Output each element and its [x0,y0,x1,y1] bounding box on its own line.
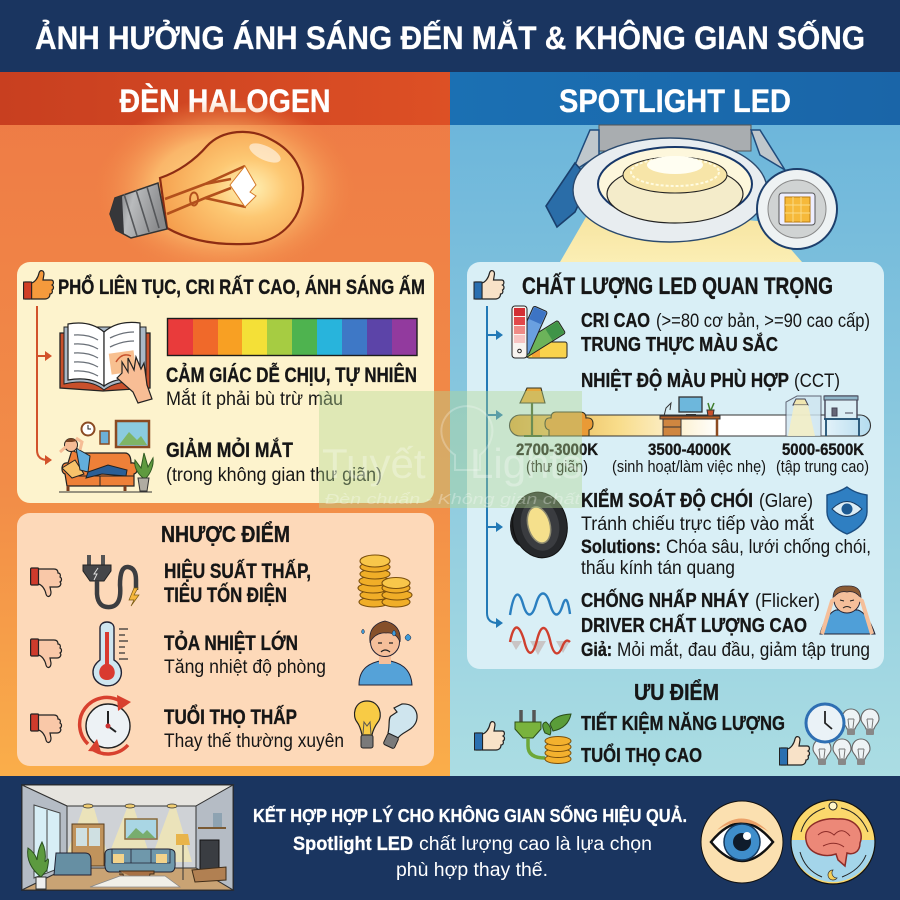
watermark: Lights [470,440,582,487]
labels: cool CCT [776,440,869,476]
card: halogen cons [17,513,434,766]
icon: gold coins [358,555,412,607]
text: short lifespan [164,705,344,752]
text: CRI: CRI CAO [581,310,650,332]
text: CRI: (>=80 cơ bản, >=90 cao cấp) [656,311,870,332]
text: comfortable: CẢM GIÁC DỄ CHỊU, TỰ NHIÊN [166,363,417,387]
text: conclusion: chất lượng cao là lựa chọn [419,834,652,855]
LED header [450,72,900,125]
text: short lifespan: Thay thế thường xuyên [164,731,344,752]
icon: flicker waves [510,594,570,655]
icon: sweating person [359,621,412,685]
icon: clock with bulbs and thumb [780,704,879,765]
icon: eye [701,801,783,883]
card: LED quality [467,262,884,669]
arrow: blue connector [487,306,503,628]
icon: green plug with coins [515,710,571,764]
text: high heat: Tăng nhiệt độ phòng [164,657,326,678]
icon: plug [83,555,139,607]
icon: living room [22,785,233,890]
text: CCT: (CCT) [794,371,840,392]
icon: thermometer [93,622,128,686]
labels: neutral CCT [612,440,766,476]
text: conclusion: KẾT HỢP HỢP LÝ CHO KHÔNG GIAN SỐNG HIỆU QUẢ. [253,805,687,826]
text: reduces eye strain: GIẢM MỎI MẮT [166,438,293,462]
text: flicker [581,588,870,661]
text: flicker: CHỐNG NHẤP NHÁY [581,588,750,612]
text: CCT: NHIỆT ĐỘ MÀU PHÙ HỢP [581,368,789,392]
icon: person resting on sofa [59,421,153,492]
watermark: Tuyết [322,440,426,487]
icon: aquarium workspace [786,396,860,436]
text: glare [581,488,871,579]
text: conclusion: phù hợp thay thế. [396,860,548,881]
text: glare: Tránh chiếu trực tiếp vào mắt [581,513,815,535]
icon: LED downlight with chip [546,125,837,262]
text: short lifespan: TUỔI THỌ THẤP [164,705,297,729]
icon: person with headache [820,586,875,634]
icon: thumb up pros left [474,722,504,750]
card: halogen pros [17,262,434,503]
text: conclusion [253,805,687,881]
labels: neutral CCT: (sinh hoạt/làm việc nhẹ) [612,458,766,476]
text: CRI [581,310,870,356]
chart: CCT scale [510,388,870,436]
icon: anti-glare reflector [507,487,573,563]
text: high heat [164,631,326,678]
text: glare: thấu kính tán quang [581,558,735,579]
heading: cons: NHƯỢC ĐIỂM [161,520,290,547]
text: in relaxing spaces: (trong không gian thư giãn) [166,465,382,486]
text: low efficiency: HIỆU SUẤT THẤP, [164,559,311,583]
labels: warm CCT [516,440,599,476]
text: flicker: Giả: [581,640,612,661]
arrow: orange connector [37,306,52,465]
text: conclusion: Spotlight LED [293,834,413,855]
labels: warm CCT: 2700-3000K [516,440,599,459]
text: flicker: DRIVER CHẤT LƯỢNG CAO [581,614,807,637]
heading: pros: ƯU ĐIỂM [634,678,719,705]
text: pros list: TIẾT KIỆM NĂNG LƯỢNG [581,711,785,735]
text: low efficiency [164,559,311,607]
icon: desk with monitor [660,397,720,436]
text: pros list [581,711,785,767]
text: flicker: Mỏi mắt, đau đầu, giảm tập trung [617,639,870,661]
text: glare: Solutions: [581,537,661,558]
panel: spotlight LED [450,72,900,776]
labels: cool CCT: (tập trung cao) [776,458,869,476]
labels: neutral CCT: 3500-4000K [648,440,732,459]
spectrum bar [168,318,417,356]
icon: halogen bulb [95,98,355,278]
text: glare: KIỂM SOÁT ĐỘ CHÓI [581,488,753,512]
icon: shield with eye [827,487,867,534]
icon: thumb up blue [474,271,504,299]
panel: halogen [0,72,450,776]
labels: cool CCT: 5000-6500K [782,440,865,459]
text: pros list: TUỔI THỌ CAO [581,743,702,767]
heading: halogen quality: PHỔ LIÊN TỤC, CRI RẤT CAO, ÁNH SÁNG ẤM [58,275,425,299]
halogen header: ĐÈN HALOGEN [120,83,330,119]
text: CRI: TRUNG THỰC MÀU SẮC [581,332,778,356]
text: low efficiency: TIÊU TỐN ĐIỆN [164,583,287,607]
text: flicker: (Flicker) [755,591,820,612]
text: glare: (Glare) [759,491,813,512]
footer band [0,776,900,900]
labels: warm CCT: (thư giãn) [526,458,588,476]
icon: thumb up orange [24,271,54,299]
icon: whole and broken bulb [354,701,417,749]
title: ẢNH HƯỞNG ÁNH SÁNG ĐẾN MẮT & KHÔNG GIAN SỐNG [35,20,865,56]
icon: open book with hand [60,322,152,403]
icon: clock with arrows [80,695,131,754]
icon: floor lamp and sofa [520,388,593,436]
watermark [319,391,582,508]
icon: thumb down 3 [31,714,62,742]
text: high heat: TỎA NHIỆT LỚN [164,631,298,655]
icon: thumb down 2 [31,639,62,667]
text: glare: Chóa sâu, lưới chống chói, [666,537,871,558]
icon: brain and day-night cycle [791,800,875,884]
text: less colour compensation: Mắt ít phải bù trừ màu [166,388,343,410]
LED header: SPOTLIGHT LED [559,83,791,119]
icon: colour swatches [512,306,567,358]
watermark: Đèn chuẩn - Không gian chất [325,491,581,508]
halogen header [0,72,450,125]
icon: thumb down 1 [31,568,62,596]
